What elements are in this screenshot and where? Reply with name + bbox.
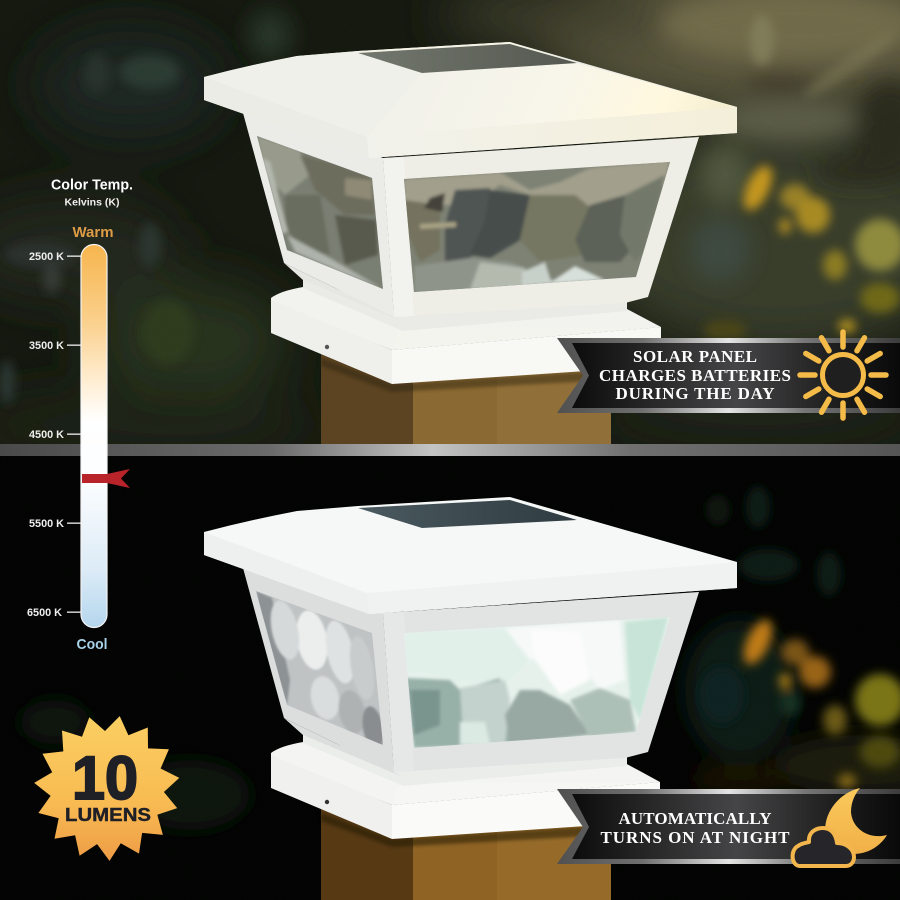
red marker arrow [82, 469, 130, 488]
lamp base [271, 276, 661, 384]
tick labels: 4500 K [29, 429, 64, 441]
icon: moon [825, 788, 887, 854]
lamp: night [204, 497, 737, 839]
scale heading: Color Temp. [51, 178, 133, 194]
wooden post: day [321, 350, 611, 444]
lumens number: 10 [72, 744, 138, 812]
lamp roof [204, 42, 737, 158]
banner text [600, 809, 790, 847]
banner text: SOLAR PANEL [633, 347, 757, 366]
banner text: TURNS ON AT NIGHT [600, 828, 790, 847]
divider bar between day and night [0, 444, 900, 456]
lumens label: LUMENS [65, 804, 151, 825]
wooden post: night [321, 805, 611, 900]
lamp body frame [243, 113, 699, 322]
gradient bar [81, 244, 107, 628]
tick labels: 5500 K [29, 518, 64, 530]
tick labels: 3500 K [29, 340, 64, 352]
lamp body frame [243, 568, 699, 777]
tick labels: 2500 K [29, 251, 64, 263]
banner text [599, 347, 791, 403]
panel: daytime background [0, 0, 900, 460]
banner text: DURING THE DAY [616, 384, 774, 403]
glass pane: front [400, 160, 675, 295]
banner: solar panel charges batteries [557, 332, 900, 418]
banner: automatically turns on at night [557, 788, 900, 866]
glass pane: front [400, 615, 675, 750]
icon: sun [800, 332, 886, 418]
scale unit: Kelvins (K) [64, 196, 120, 208]
panel: nighttime background [15, 482, 900, 836]
tick labels [27, 251, 81, 619]
lamp roof [204, 497, 737, 614]
lamp base [271, 731, 660, 839]
cool label: Cool [76, 636, 108, 653]
banner text: AUTOMATICALLY [618, 809, 772, 828]
tick labels: 6500 K [27, 607, 62, 619]
lumens badge [34, 716, 179, 861]
glass pane: side [255, 589, 387, 751]
icon: cloud [793, 828, 854, 866]
color temperature scale [27, 178, 133, 653]
warm label: Warm [72, 225, 114, 241]
lamp: day [204, 42, 737, 384]
solar panel [358, 44, 577, 73]
solar panel [358, 500, 577, 528]
banner text: CHARGES BATTERIES [599, 366, 791, 385]
glass pane: side [255, 134, 385, 292]
